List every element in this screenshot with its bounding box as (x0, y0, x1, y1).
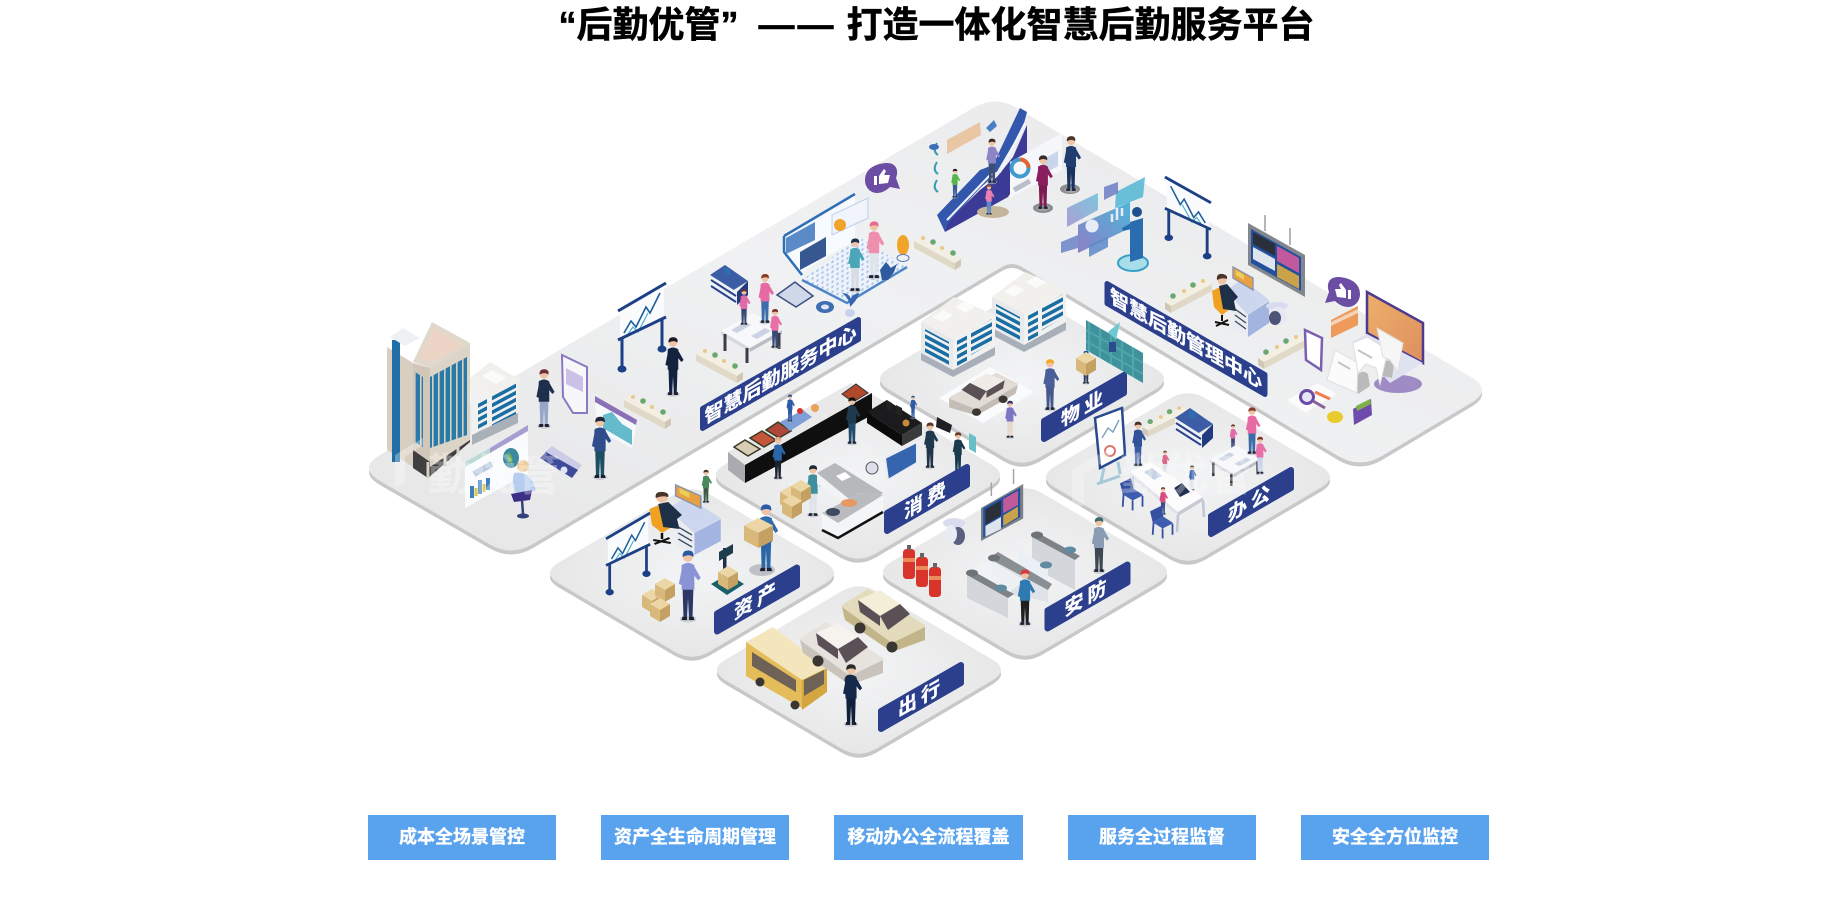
planter five (1258, 335, 1305, 369)
button: cost control (368, 815, 556, 860)
platform: office (1046, 393, 1330, 565)
platform: security (883, 488, 1167, 660)
icon: thumbs up service (865, 163, 900, 193)
label: assets (717, 568, 797, 632)
label: security: 安防 (1065, 574, 1110, 621)
office board and presenter (1095, 408, 1146, 484)
clerk in green apron (702, 470, 712, 504)
watermark right (1072, 448, 1252, 510)
label: management center: 智慧后勤管理中心 (1110, 285, 1262, 394)
label: property (1044, 375, 1124, 439)
button: mobile office: 移动办公全流程覆盖 (848, 827, 1010, 847)
orange lamp with plant (880, 235, 909, 280)
button: service supervision (1068, 815, 1256, 860)
label: service center: 智慧后勤服务中心 (705, 321, 857, 429)
car on parking pad (939, 367, 1034, 423)
lockers (1086, 320, 1143, 383)
person at phone display (536, 355, 587, 429)
worker and courier (1043, 351, 1096, 412)
property buildings (921, 272, 1066, 377)
catering counter (728, 383, 922, 483)
button: safety monitoring: 安全全方位监控 (1332, 827, 1458, 847)
security camera (1266, 302, 1288, 325)
woman with mop (1005, 401, 1017, 439)
presenter in dark suit (665, 337, 684, 397)
platform: property (880, 295, 1164, 467)
coins (1327, 411, 1343, 423)
office meeting group (1210, 407, 1267, 486)
watermark left: 勤优管 (428, 451, 560, 500)
folder (1353, 399, 1372, 425)
security gates (966, 532, 1080, 618)
office cabinet (1175, 408, 1213, 448)
office tower (387, 322, 470, 478)
phone outline (1305, 330, 1322, 370)
button: asset lifecycle: 资产全生命周期管理 (614, 827, 776, 847)
assets flip chart (606, 513, 651, 595)
credit card (1331, 306, 1358, 338)
laptop style interaction screen with two people (784, 194, 907, 317)
label: property: 物业 (1061, 384, 1107, 432)
food display screen (866, 417, 976, 480)
parcels near kiosk (780, 480, 811, 519)
beige car (842, 589, 925, 652)
escalator with people (937, 108, 1027, 232)
man in navy suit (843, 664, 862, 727)
management desk (1212, 267, 1269, 337)
display board with seated figure (465, 425, 536, 518)
assets desk (650, 485, 721, 555)
worker with parcel (744, 504, 778, 576)
platform: consumption (716, 391, 1000, 563)
hanging monitoring wall (1248, 215, 1305, 297)
button: safety monitoring (1301, 815, 1489, 860)
checkout kiosk (817, 463, 883, 538)
label: security (1048, 564, 1128, 628)
meeting group service center (710, 265, 834, 363)
label: consumption (887, 467, 967, 531)
magnifier on document (1287, 383, 1336, 413)
label: office (1211, 470, 1291, 534)
planter three (914, 236, 961, 270)
button: asset lifecycle (601, 815, 789, 860)
label: transport (881, 665, 961, 729)
button: cost control: 成本全场景管控 (399, 827, 525, 847)
planter six (1142, 406, 1188, 437)
platform: transport (717, 586, 1001, 758)
icon: thumbs up management (1325, 277, 1360, 307)
button: service supervision: 服务全过程监督 (1099, 827, 1225, 847)
bus (746, 627, 827, 710)
parcels (642, 578, 675, 622)
low-rise building beside tower (470, 362, 520, 445)
platform: smart logistics service and management centers (369, 102, 1482, 554)
watermark right: 勤优管 (1120, 451, 1252, 500)
planter two (696, 349, 743, 383)
donut chart screen (1010, 133, 1062, 198)
catering staff (773, 395, 965, 518)
laptop and paper receipts (1327, 292, 1423, 394)
purple ticket stack (540, 446, 582, 478)
planter one (624, 395, 671, 429)
woman with scanner (679, 551, 701, 623)
label: transport: 出行 (898, 674, 944, 722)
fire extinguishers (903, 545, 941, 597)
watermark left (395, 438, 560, 500)
office center table (1120, 451, 1204, 538)
two business people (1033, 136, 1081, 213)
platform: assets (550, 489, 834, 661)
label: office: 办公 (1228, 479, 1274, 527)
label: assets: 资产 (734, 577, 780, 624)
security screen (981, 469, 1023, 541)
label: consumption: 消费 (904, 476, 950, 524)
holographic data panels with person (1061, 177, 1148, 271)
person at chart board (592, 396, 637, 480)
security camera (943, 518, 965, 545)
woman at gate (1018, 570, 1035, 627)
flip chart right (1164, 177, 1211, 259)
white car (800, 622, 883, 686)
flip chart left (618, 283, 666, 372)
title: “后勤优管” —— 打造一体化智慧后勤服务平台 (558, 4, 1315, 45)
button: mobile office (834, 815, 1023, 860)
guard (1092, 517, 1109, 574)
floating area chart and arrows (929, 120, 997, 192)
planter four (1165, 279, 1212, 313)
parcel scale (711, 544, 744, 595)
